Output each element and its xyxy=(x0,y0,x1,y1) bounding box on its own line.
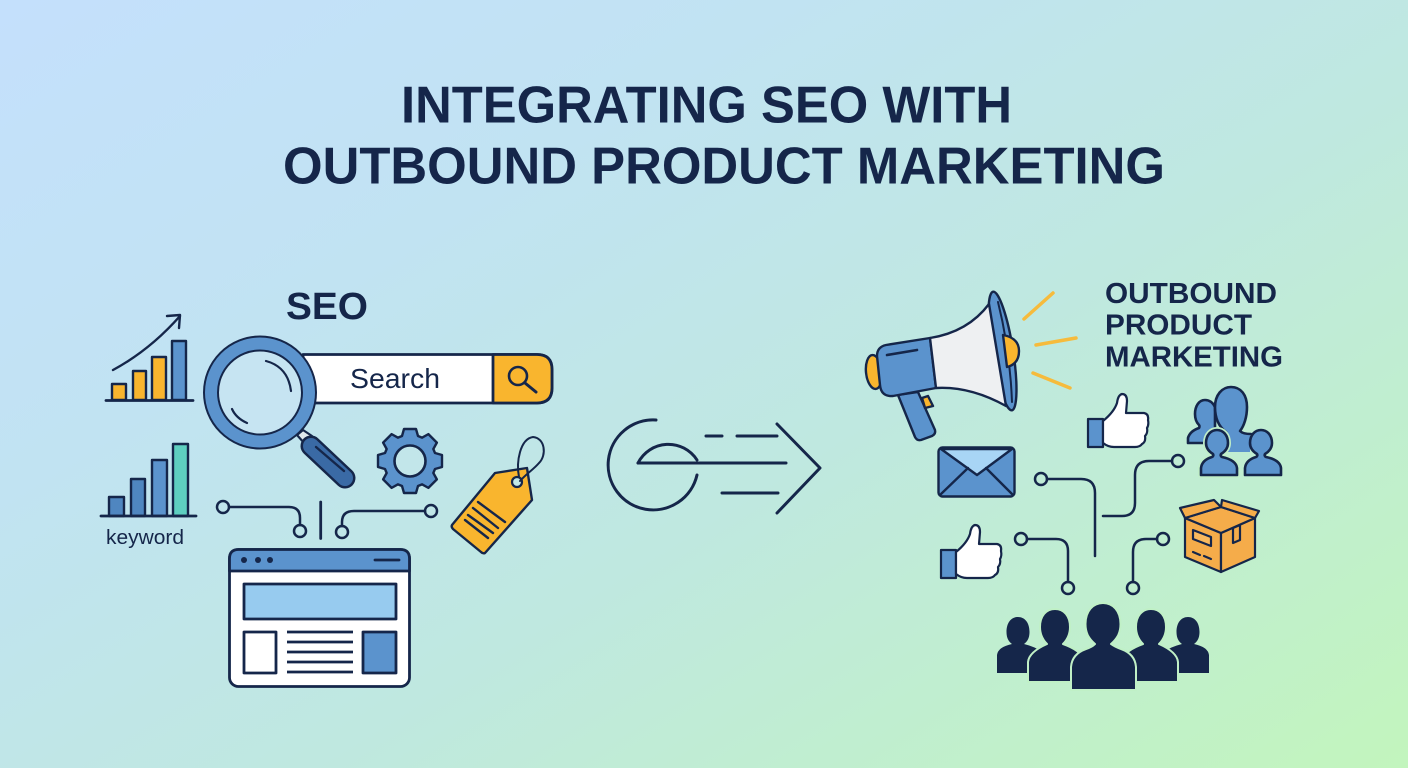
icon: thumbs up top xyxy=(1088,394,1148,447)
title xyxy=(283,76,1165,196)
heading: outbound product marketing xyxy=(1105,278,1283,374)
icon: blue people group xyxy=(1188,387,1281,475)
panel: SEO xyxy=(101,286,552,686)
icon: thumbs up lower xyxy=(941,525,1001,578)
panel: outbound product marketing xyxy=(864,278,1283,690)
title: OUTBOUND PRODUCT MARKETING xyxy=(283,138,1165,196)
icon: envelope xyxy=(938,448,1014,496)
heading: outbound product marketing: OUTBOUND xyxy=(1105,278,1277,310)
heading: outbound product marketing: PRODUCT xyxy=(1105,310,1252,342)
chart: rising bars with trend arrow xyxy=(106,315,193,400)
icon: gear xyxy=(378,429,442,493)
heading: outbound product marketing: MARKETING xyxy=(1105,342,1283,374)
arrow: center flow xyxy=(608,420,820,513)
search bar xyxy=(303,354,552,403)
connectors xyxy=(1015,455,1184,594)
heading: SEO: SEO xyxy=(286,286,368,328)
icon: sound rays xyxy=(1024,293,1076,388)
icon: megaphone xyxy=(864,290,1022,440)
icon: price tag xyxy=(452,437,544,553)
icon: audience silhouettes xyxy=(997,603,1209,690)
search bar: Search xyxy=(350,363,440,394)
icon: magnifying glass xyxy=(211,344,345,478)
icon: web page xyxy=(230,550,410,686)
chart: keyword bars xyxy=(101,444,196,516)
icon: box xyxy=(1180,500,1259,572)
connectors xyxy=(217,501,437,538)
label: keyword: keyword xyxy=(106,527,184,549)
title: INTEGRATING SEO WITH xyxy=(401,76,1012,134)
